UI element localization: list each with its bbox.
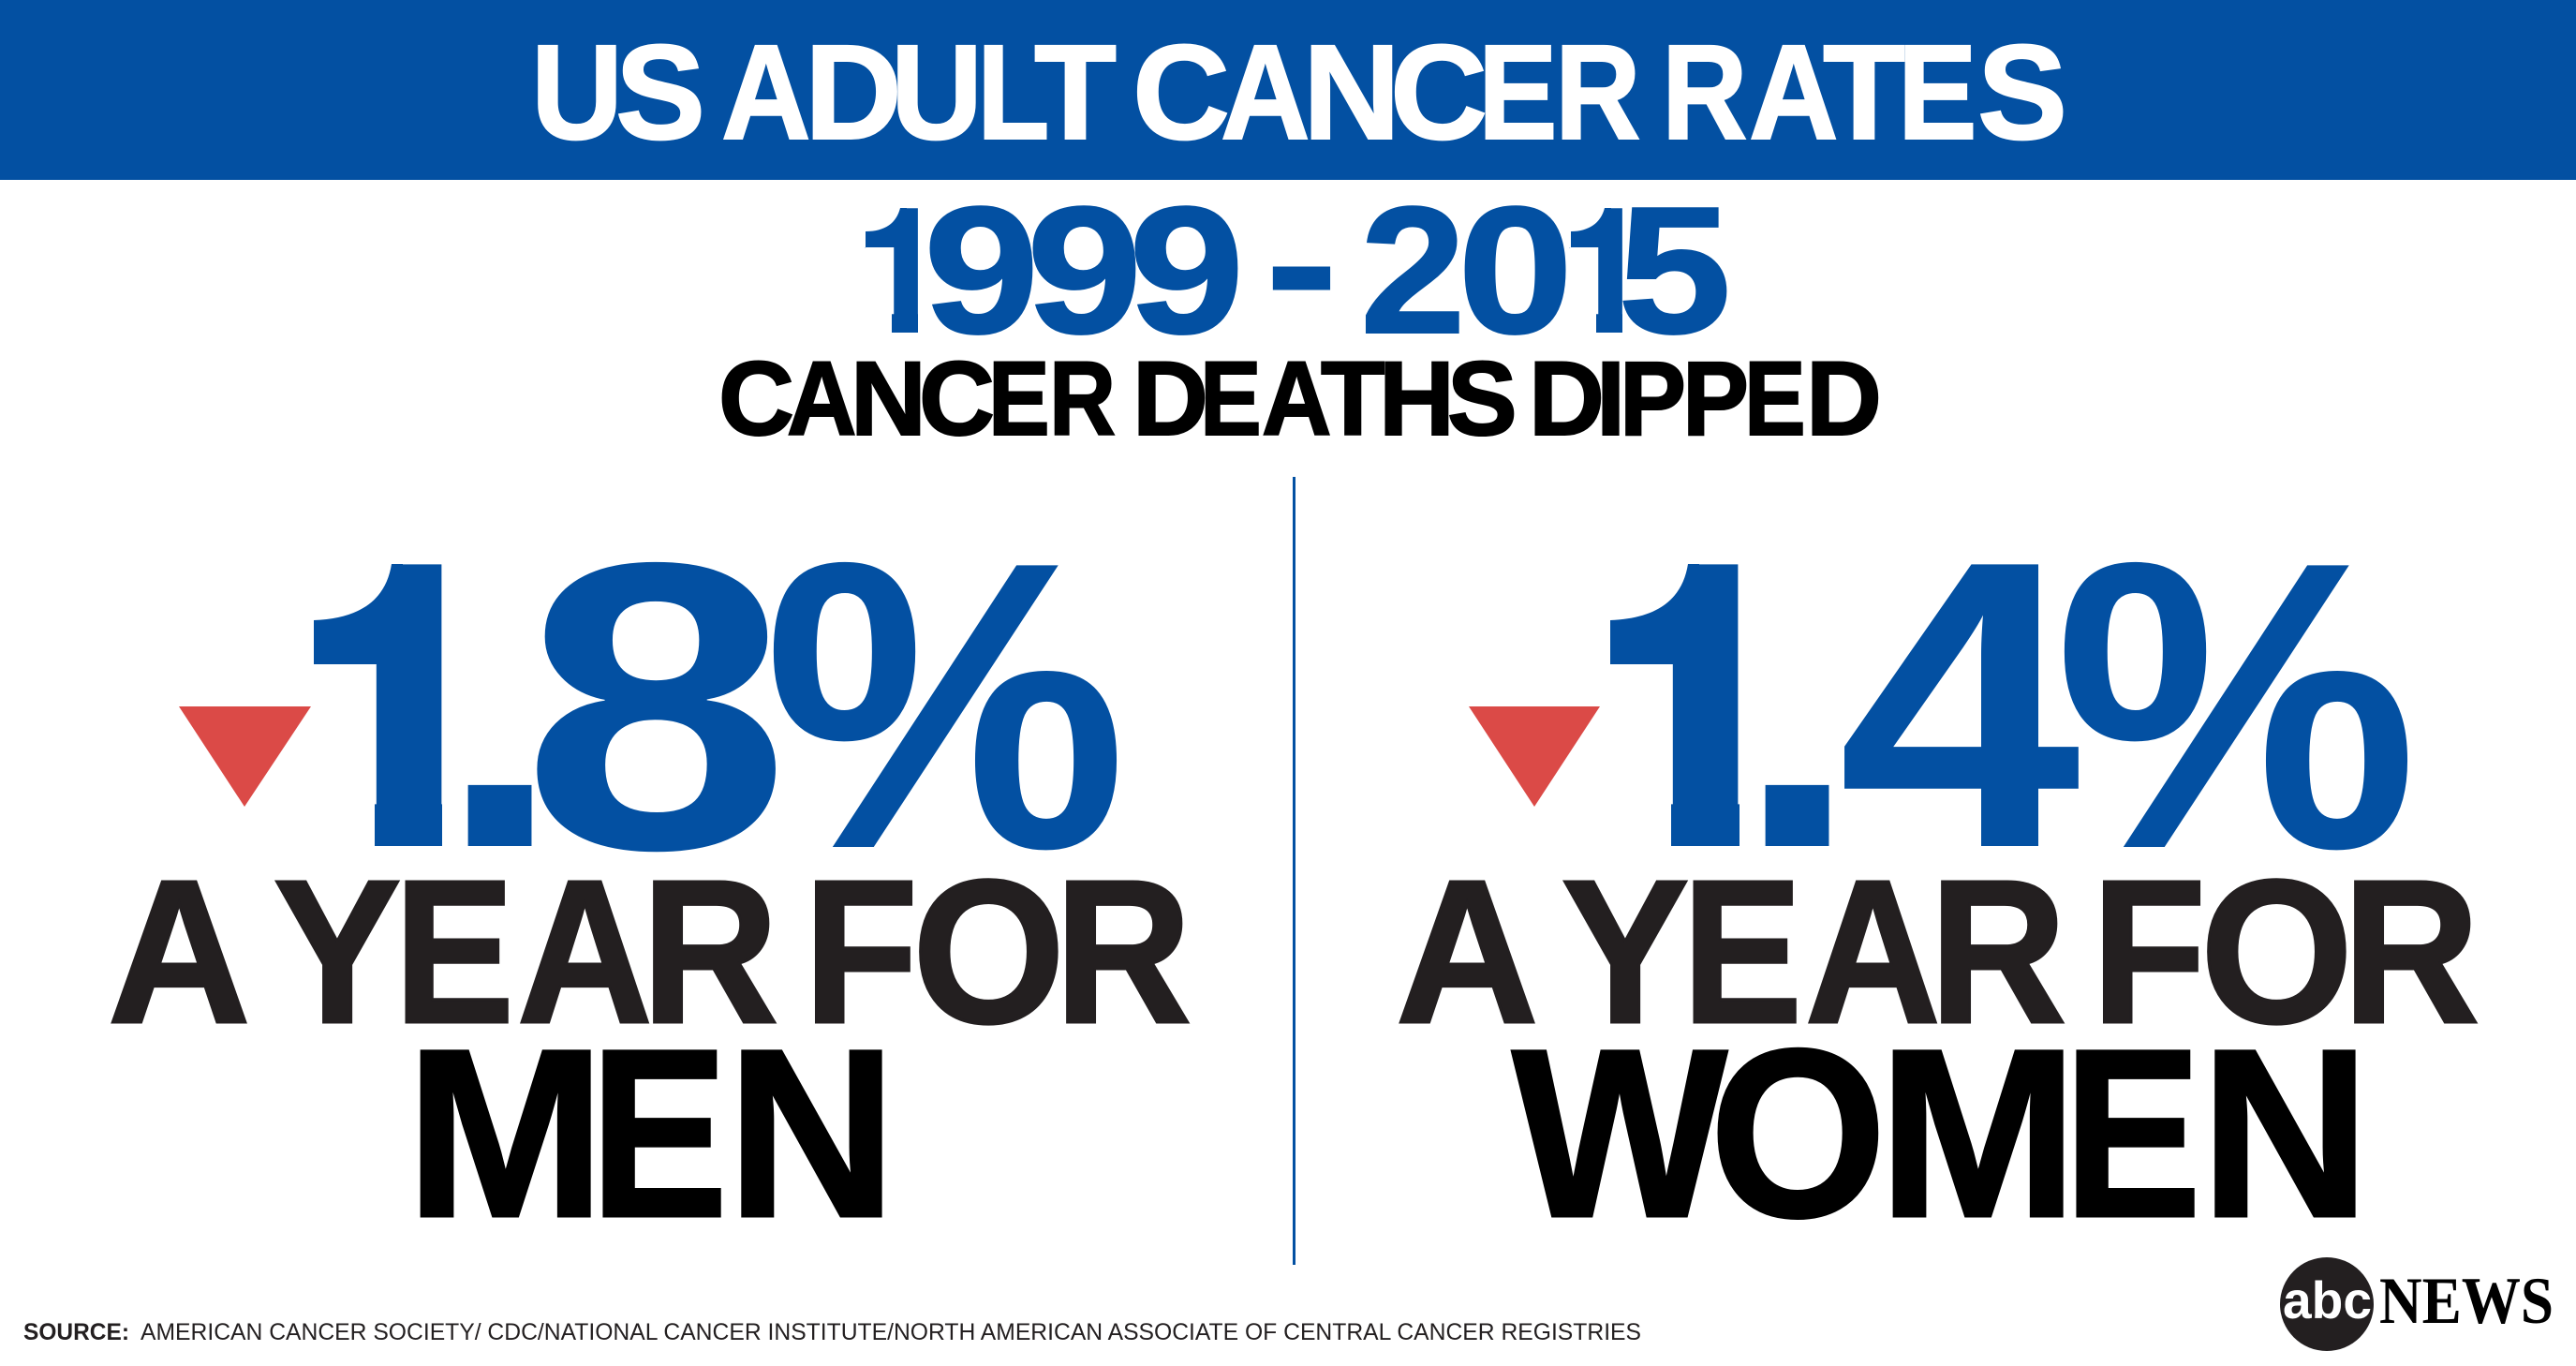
subtitle: D	[1529, 340, 1605, 457]
date range: 2	[1360, 169, 1466, 371]
stat: 1.8 percent: 1	[266, 477, 529, 933]
source note: AMERICAN CANCER SOCIETY/ CDC/NATIONAL CANCER INSTITUTE/NORTH AMERICAN ASSOCIATE OF CENTRAL CANCER REGISTRIES	[141, 1319, 1641, 1345]
stat: 1.4 percent: 1	[1562, 477, 1826, 933]
title: D	[805, 17, 902, 168]
label: women: M	[1878, 1000, 2078, 1268]
subtitle: A	[1262, 340, 1331, 457]
title: C	[1390, 17, 1488, 168]
title: S	[1977, 17, 2067, 168]
logo: abc news	[2280, 1257, 2554, 1351]
label: a year for: A	[517, 839, 653, 1066]
title: S	[615, 17, 705, 168]
label: a year for: E	[1682, 839, 1802, 1066]
title: U	[531, 17, 623, 168]
label: a year for: A	[1396, 839, 1533, 1066]
label: men: E	[590, 1000, 728, 1268]
subtitle: C	[919, 340, 995, 457]
date range: 9	[1129, 170, 1244, 372]
label: men: N	[727, 1000, 896, 1268]
subtitle: P	[1682, 340, 1749, 457]
label: a year for: O	[2200, 839, 2353, 1066]
label: a year for: Y	[1562, 839, 1689, 1066]
center divider	[1293, 477, 1295, 1265]
logo: abc news: abc	[2283, 1270, 2372, 1329]
label: a year for: F	[804, 839, 918, 1066]
label: a year for: A	[108, 839, 245, 1066]
label: a year for: R	[1930, 839, 2066, 1066]
title: A	[1221, 17, 1310, 168]
stat: 1.8 percent: %	[763, 476, 1128, 934]
stat: 1.8 percent: 8	[522, 478, 791, 935]
date range: -	[1266, 162, 1338, 364]
title: T	[1034, 17, 1117, 168]
label: a year for: R	[2343, 839, 2480, 1066]
date range	[848, 162, 1731, 372]
title: R	[1555, 17, 1641, 168]
title: T	[1823, 17, 1905, 168]
stat: 1.8 percent	[266, 476, 1128, 935]
subtitle: E	[1744, 340, 1806, 457]
stat: 1.4 percent: .	[1735, 476, 1860, 933]
stat: 1.4 percent	[1562, 475, 2419, 934]
label: men: M	[406, 1000, 605, 1268]
header banner	[0, 0, 2576, 180]
logo: abc news: NEWS	[2379, 1265, 2554, 1338]
subtitle: D	[1806, 340, 1882, 457]
label: women: N	[2200, 1000, 2370, 1268]
subtitle: S	[1447, 340, 1517, 457]
title: E	[1478, 17, 1557, 168]
subtitle: E	[988, 340, 1050, 457]
title: A	[1749, 17, 1839, 168]
subtitle: N	[851, 340, 926, 457]
label: a year for: O	[912, 839, 1065, 1066]
subtitle: H	[1379, 340, 1455, 457]
subtitle: I	[1596, 340, 1625, 457]
subtitle: D	[1133, 340, 1208, 457]
date range: 1	[853, 170, 950, 372]
stat: 1.8 percent: .	[437, 476, 563, 933]
label: a year for: Y	[274, 839, 401, 1066]
date range: 5	[1618, 170, 1731, 371]
date range: 9	[924, 170, 1039, 372]
title: U	[891, 17, 983, 168]
panel: men	[108, 476, 1192, 1268]
subtitle: R	[1049, 340, 1116, 457]
subtitle: E	[1200, 340, 1262, 457]
stat: 1.4 percent: 4	[1838, 475, 2083, 933]
label: a year for: F	[2092, 839, 2206, 1066]
subtitle: C	[718, 340, 794, 457]
label: women: O	[1710, 1000, 1887, 1268]
label: a year for: R	[1055, 839, 1192, 1066]
icon: down triangle women	[1469, 706, 1600, 807]
label: women: W	[1512, 1000, 1727, 1268]
date range: 0	[1458, 170, 1573, 372]
date range: 9	[1027, 170, 1142, 372]
source note: SOURCE:	[23, 1319, 129, 1345]
title: E	[1898, 17, 1976, 168]
title: C	[1133, 17, 1230, 168]
label: women: E	[2064, 1000, 2201, 1268]
label: a year for: R	[642, 839, 778, 1066]
title: R	[1662, 17, 1748, 168]
subtitle: A	[787, 340, 856, 457]
date range: 1	[1558, 170, 1654, 372]
label: a year for: E	[394, 839, 514, 1066]
subtitle: P	[1620, 340, 1686, 457]
panel: women	[1396, 475, 2480, 1268]
title: L	[977, 17, 1049, 168]
title: N	[1303, 17, 1400, 168]
subtitle: T	[1321, 340, 1384, 457]
label: a year for: A	[1805, 839, 1941, 1066]
title: A	[721, 17, 811, 168]
stat: 1.4 percent: %	[2054, 476, 2419, 934]
icon: down triangle men	[179, 706, 311, 807]
